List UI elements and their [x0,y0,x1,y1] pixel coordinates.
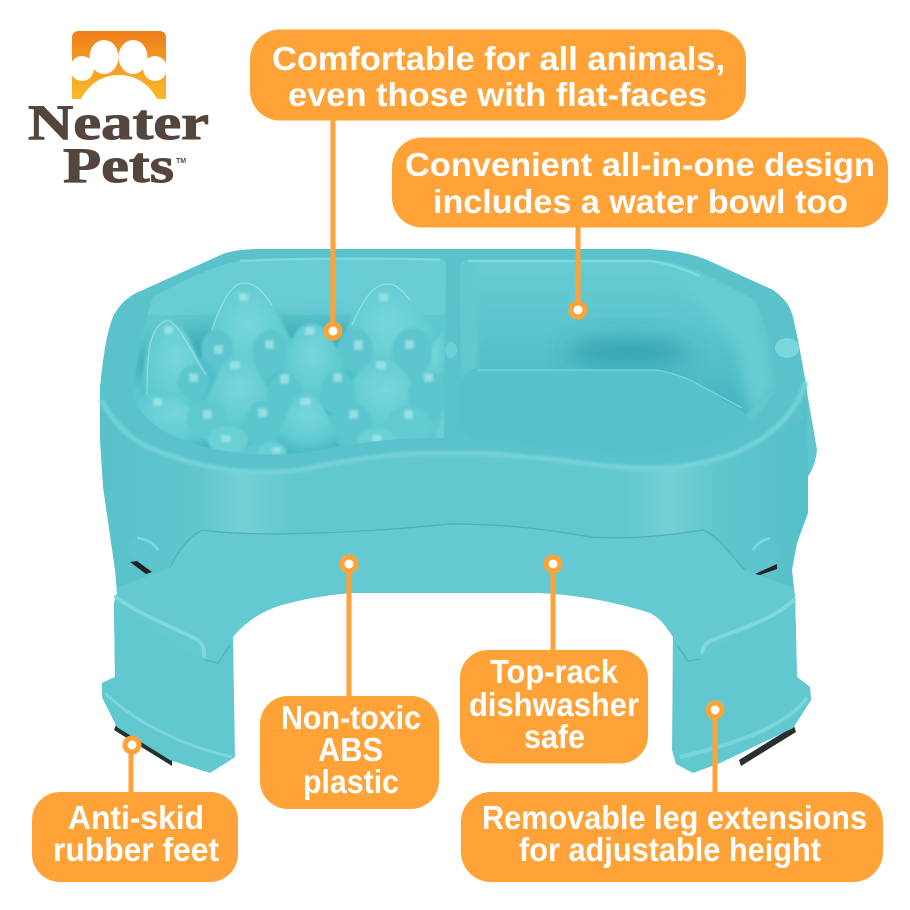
callout: water bowl [392,138,888,317]
water bowl rim highlight [468,261,700,276]
centre divider [444,262,460,438]
arch band below seam [100,524,815,775]
rear side flange [790,392,817,500]
rubber feet [114,725,172,766]
top rim [100,249,807,471]
back row bumps [200,306,292,386]
left leg ridges [105,597,232,757]
logo wordmark: Pets [63,137,174,193]
connector line and dot [326,118,340,338]
callout: removable leg extensions: for adjustable height [519,831,821,868]
water bowl [460,260,770,414]
bump highlights [147,283,410,395]
callout: non-toxic ABS plastic: plastic [303,763,399,800]
icon: orange paw badge [70,31,167,99]
water bowl floor [474,370,746,414]
callout: water bowl: includes a water bowl too [433,183,848,220]
callout: top-rack dishwasher safe: dishwasher [469,686,639,723]
logo wordmark [28,94,209,193]
corner nub [775,338,799,358]
connector line and dot [546,557,560,652]
rim front lip highlight [101,382,806,472]
connector line and dot [571,226,585,317]
connector line and dot [708,703,722,794]
food bowl [125,255,450,462]
connector line and dot [125,738,139,794]
callout: removable leg extensions [461,703,883,882]
food bowl rim highlight [240,259,440,261]
callout: comfortable for all animals [250,30,746,338]
valley bumps [252,330,278,360]
logo wordmark: TM [176,158,186,165]
callout: non-toxic ABS plastic: Non-toxic [281,699,421,736]
callout: top-rack dishwasher safe: safe [524,718,585,755]
callout: non-toxic ABS plastic: ABS [318,731,383,768]
callout: anti-skid rubber feet: Anti-skid [68,799,204,836]
callout: removable leg extensions: Removable leg extensions [482,799,867,836]
callout: comfortable for all animals: even those with flat-faces [288,76,707,113]
right leg ridges [677,600,807,757]
callout: top-rack dishwasher safe [460,557,648,764]
callout: comfortable for all animals: Comfortable for all animals, [272,40,725,77]
callout: anti-skid rubber feet: rubber feet [53,831,219,868]
logo wordmark: Neater [28,94,209,150]
front row bumps [140,395,212,448]
callout: water bowl: Convenient all-in-one design [405,146,875,183]
clips with black pads [128,536,778,575]
bowl legs and body [100,249,811,773]
connector line and dot [342,557,356,698]
callout: non-toxic ABS plastic [260,557,439,809]
callout: top-rack dishwasher safe: Top-rack [490,653,619,690]
callout: anti-skid rubber feet [32,738,238,882]
leg faces [100,603,235,770]
product: elevated slow-feeder bowl [100,249,817,775]
logo: Neater Pets [28,31,209,193]
middle row bumps [280,323,346,415]
